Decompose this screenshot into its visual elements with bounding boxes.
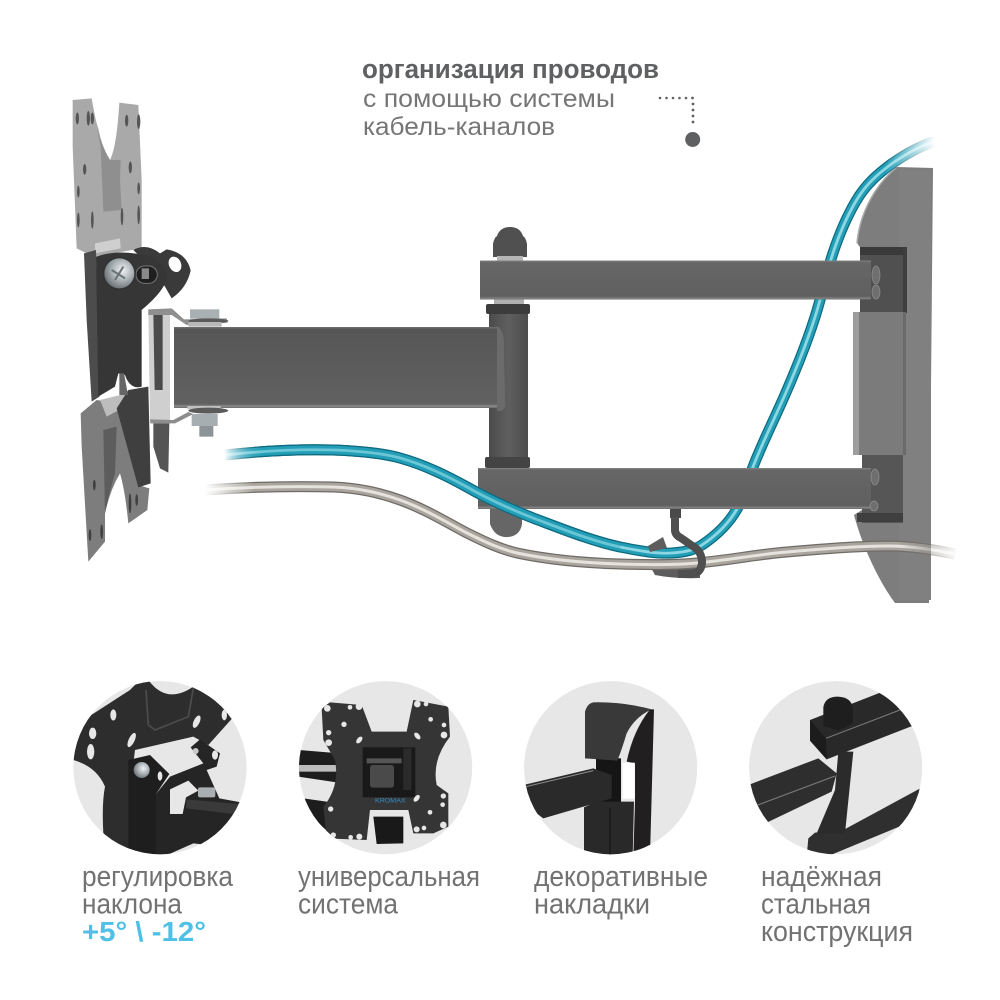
front black bracket: [96, 252, 167, 487]
right column: [627, 709, 654, 857]
lower bolt and bracket tab: [150, 406, 228, 437]
plate: [73, 680, 237, 860]
center window: [363, 747, 415, 797]
wall plate: [854, 167, 933, 603]
short arm: [174, 326, 505, 411]
caption: steel construction: стальная: [761, 888, 871, 920]
lower column: [584, 802, 634, 857]
dotted leader with end point: [659, 97, 700, 147]
rear bracket and arm: [156, 740, 240, 854]
tilt screw: [103, 257, 136, 290]
front bracket: [128, 755, 169, 860]
thumbnail: universal VESA plate: [298, 681, 472, 854]
rear tilt ear: [133, 247, 191, 298]
window: [170, 781, 198, 814]
cable hook: [670, 509, 702, 574]
caption: tilt adjustment: +5° \ -12°: [82, 916, 206, 947]
arm face: [186, 799, 238, 814]
knob: [823, 697, 853, 731]
caption: steel construction: надёжная: [761, 861, 882, 893]
bottom tab: [373, 817, 403, 844]
plate: [322, 700, 450, 840]
screw: [134, 762, 150, 778]
callout text: с помощью системы: [363, 85, 615, 113]
pillar: [817, 752, 853, 833]
thumbnail: tilt adjustment: [73, 680, 247, 860]
bar end welds: [870, 266, 880, 511]
pivot pillar: [485, 299, 530, 468]
decorative column cover: [853, 312, 906, 455]
pivot: [596, 758, 621, 803]
lower long bar: [478, 468, 871, 509]
plate embossing: [146, 688, 193, 730]
grey cable: [205, 487, 955, 565]
caption: decorative covers: накладки: [534, 888, 650, 920]
tilt head and VESA plate: [73, 98, 228, 562]
nut: [198, 787, 215, 797]
lower left bar: [748, 758, 837, 827]
lower VESA plate: [81, 393, 149, 562]
upper long bar: [480, 260, 871, 300]
thumbnail: decorative covers: [523, 681, 697, 857]
tilt slot: [136, 266, 157, 283]
blue cable: front section: [225, 450, 620, 547]
upper right bar: [810, 693, 912, 760]
caption: universal system: универсальная: [298, 861, 480, 893]
ear holes: [158, 750, 218, 781]
rear support plate: [148, 310, 170, 473]
caption: universal system: [298, 861, 480, 920]
upper VESA plate: [73, 98, 142, 257]
right column upper: [860, 247, 907, 313]
callout heading: организация проводов: [362, 56, 659, 84]
holes: [87, 709, 227, 759]
caption: tilt adjustment: регулировка: [82, 861, 233, 893]
thumbnail: steel construction: [748, 676, 923, 857]
cable clip body: [648, 537, 700, 578]
right column lower: [857, 455, 903, 523]
caption: decorative covers: декоративные: [534, 861, 708, 893]
upper bolt and bracket tab: [148, 308, 228, 327]
lower right bar: [807, 787, 923, 857]
horizontal arm: [523, 768, 612, 818]
callout text: кабель-каналов: [363, 113, 555, 141]
caption: tilt adjustment: наклона: [82, 888, 182, 920]
window: [623, 763, 635, 799]
caption: universal system: система: [298, 888, 398, 920]
caption: decorative covers: [534, 861, 708, 920]
top knob: [493, 227, 527, 261]
callout: cable organisation: [362, 56, 700, 147]
caption: steel construction: конструкция: [761, 916, 913, 948]
caption: steel construction: [761, 861, 913, 948]
wall mount arm product illustration: [73, 98, 955, 603]
holes: [324, 701, 447, 840]
top cover: [585, 702, 652, 761]
background arm: [299, 750, 336, 830]
bottom knob: [490, 509, 522, 537]
callout text: [363, 85, 615, 141]
brand mark: KROMAX: [375, 798, 406, 805]
plate spine: [84, 250, 99, 402]
caption: tilt adjustment: [82, 861, 233, 947]
blue cable: rear section: [225, 142, 933, 553]
